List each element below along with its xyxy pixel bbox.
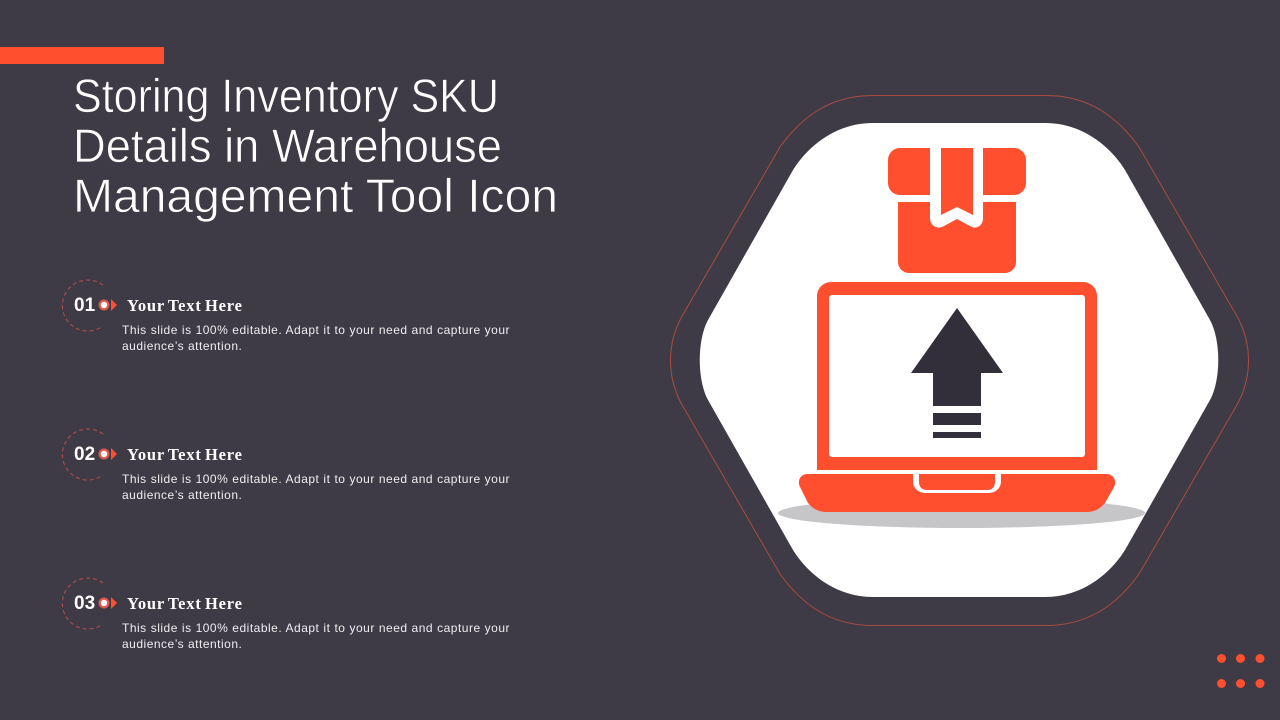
title: Details in Warehouse bbox=[73, 119, 502, 172]
heading 03: Your Text Here bbox=[127, 594, 243, 613]
white hexagon bbox=[700, 123, 1218, 597]
accent bar bbox=[0, 47, 164, 64]
title bbox=[73, 69, 558, 222]
number 03: 03 bbox=[74, 593, 95, 614]
marker 03 bbox=[62, 578, 117, 630]
body 02: This slide is 100% editable. Adapt it to your need and capture your audience’s attention. bbox=[122, 472, 510, 502]
item 01 bbox=[62, 280, 510, 353]
title: Storing Inventory SKU bbox=[73, 69, 499, 122]
body 01: This slide is 100% editable. Adapt it to your need and capture your audience’s attention. bbox=[122, 323, 510, 353]
laptop shadow bbox=[778, 498, 1145, 528]
item 02 bbox=[62, 428, 510, 502]
body 03: This slide is 100% editable. Adapt it to your need and capture your audience’s attention. bbox=[122, 621, 510, 651]
icon: laptop bbox=[778, 282, 1145, 528]
number 01: 01 bbox=[74, 295, 95, 316]
heading 02: Your Text Here bbox=[127, 445, 243, 464]
marker 02 bbox=[62, 428, 117, 480]
icon: upload arrow bbox=[911, 308, 1003, 438]
outer hexagon outline bbox=[670, 96, 1248, 626]
number 02: 02 bbox=[74, 444, 95, 465]
item 03 bbox=[62, 578, 510, 651]
icon: package bbox=[888, 148, 1026, 273]
heading 01: Your Text Here bbox=[127, 296, 243, 315]
marker 01 bbox=[62, 280, 117, 332]
title: Management Tool Icon bbox=[73, 169, 558, 222]
decorative dot grid bbox=[1217, 654, 1264, 688]
